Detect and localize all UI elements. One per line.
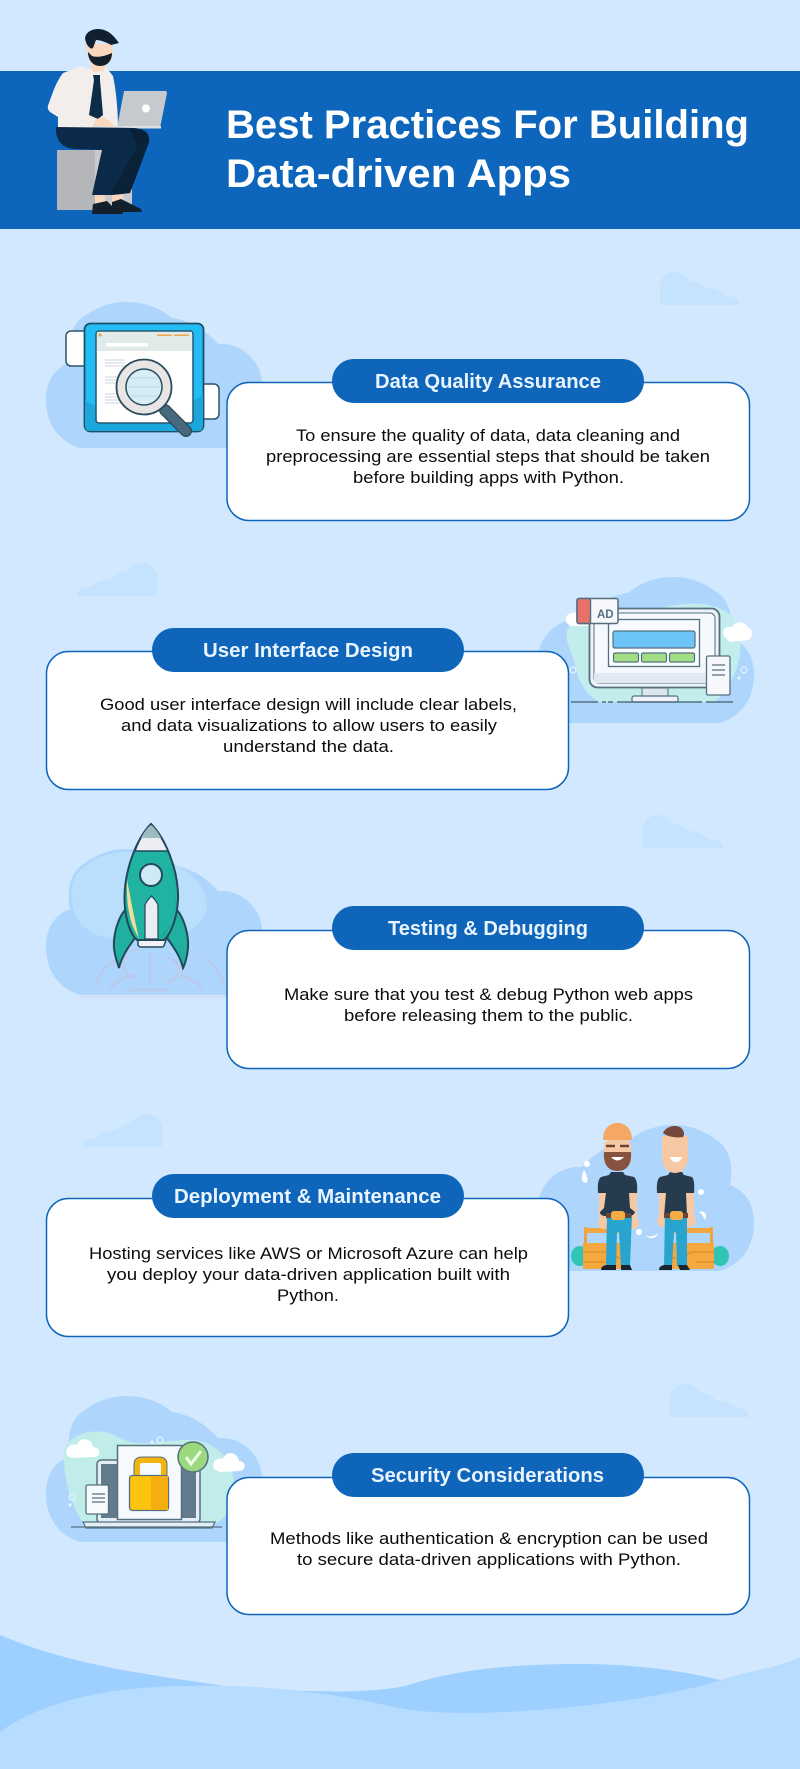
pill heading: [152, 628, 464, 672]
title: Best Practices For Building: [226, 103, 749, 147]
pill heading: Security Considerations: [371, 1465, 604, 1487]
toolbox right: [668, 1227, 714, 1269]
man with hard hat: [598, 1123, 639, 1270]
body text: [284, 985, 693, 1025]
decorative cloud 1: [660, 272, 740, 305]
icon: magnifier over web page: [46, 302, 262, 448]
decorative cloud 2: [77, 563, 157, 596]
body text: before building apps with Python.: [353, 468, 624, 487]
body text: Methods like authentication & encryption can be used: [270, 1529, 708, 1548]
pill heading: Deployment & Maintenance: [174, 1186, 441, 1208]
body text: you deploy your data-driven application built with: [107, 1265, 510, 1284]
pill heading: [332, 906, 644, 950]
body text: [266, 426, 710, 487]
pill heading: Data Quality Assurance: [375, 371, 601, 393]
icon: rocket: [46, 824, 262, 997]
body text: Python.: [277, 1286, 339, 1305]
panel: security considerations: [227, 1453, 750, 1614]
man with quiff: [657, 1126, 696, 1270]
panel: testing and debugging: [227, 906, 750, 1068]
header band: [0, 71, 800, 229]
pill heading: User Interface Design: [203, 640, 413, 662]
body text: before releasing them to the public.: [344, 1006, 633, 1025]
panel: deployment and maintenance: [46, 1174, 568, 1336]
decorative cloud 4: [82, 1114, 162, 1147]
icon: two engineers: [538, 1123, 754, 1271]
pill heading: Testing & Debugging: [388, 918, 588, 940]
toolbox left: [583, 1227, 630, 1269]
body text: [89, 1244, 528, 1305]
icon: monitor with ad: AD: [597, 609, 614, 621]
body text: [100, 695, 517, 756]
pill heading: [332, 1453, 644, 1497]
panel: data quality assurance: [227, 359, 750, 520]
body text: preprocessing are essential steps that should be taken: [266, 447, 710, 466]
decorative cloud 3: [643, 815, 723, 848]
pill heading: [152, 1174, 464, 1218]
icon: monitor with ad: [538, 577, 754, 723]
body text: Good user interface design will include clear labels,: [100, 695, 517, 714]
pill heading: [332, 359, 644, 403]
panel: user interface design: [46, 628, 568, 790]
body text: Hosting services like AWS or Microsoft Azure can help: [89, 1244, 528, 1263]
body text: Make sure that you test & debug Python web apps: [284, 985, 693, 1004]
icon: laptop with padlock: [46, 1396, 262, 1542]
body text: understand the data.: [223, 737, 394, 756]
body text: [270, 1529, 708, 1569]
body text: and data visualizations to allow users to easily: [121, 716, 498, 735]
body text: To ensure the quality of data, data cleaning and: [296, 426, 680, 445]
background waves: [0, 1635, 800, 1769]
icon: man with laptop: [48, 29, 167, 214]
title: [226, 103, 749, 196]
body text: to secure data-driven applications with Python.: [297, 1550, 681, 1569]
decorative cloud 5: [670, 1384, 750, 1417]
title: Data-driven Apps: [226, 152, 571, 196]
